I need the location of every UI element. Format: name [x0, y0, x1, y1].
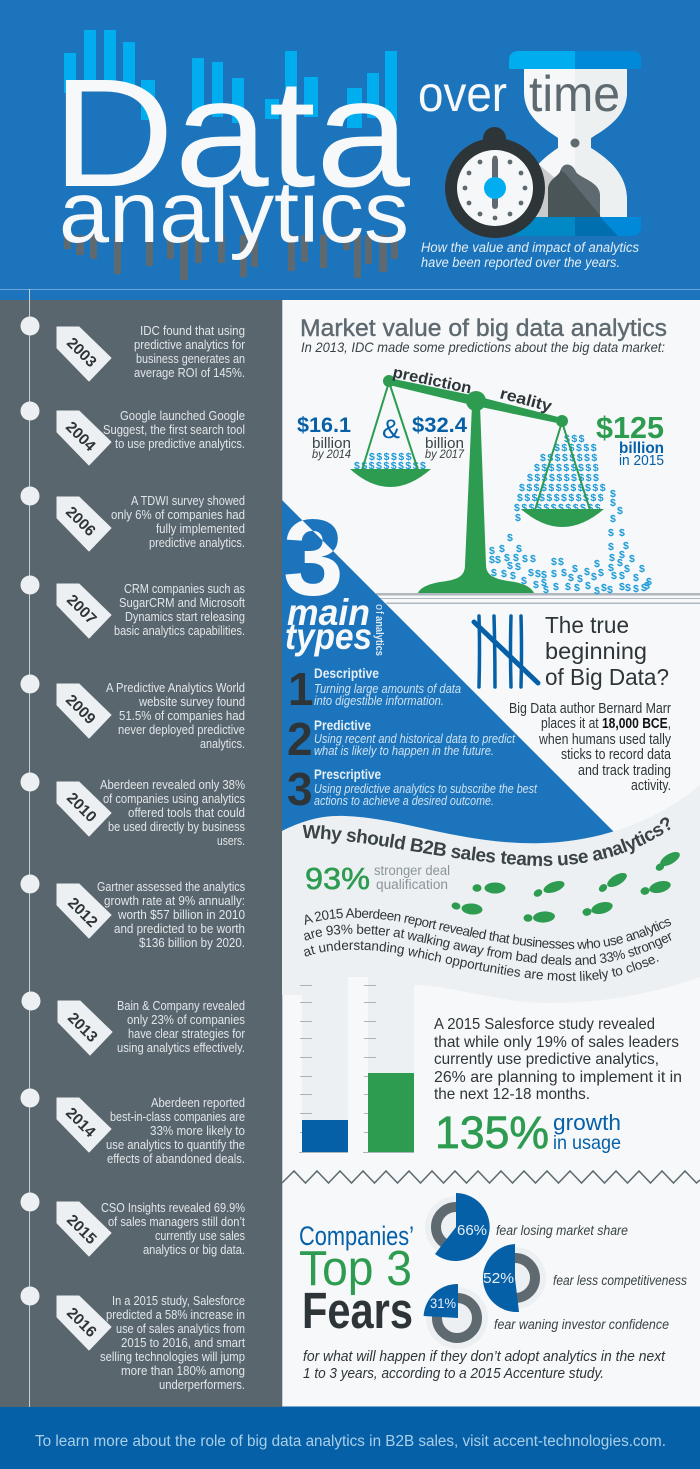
icon: hourglass — [509, 51, 641, 236]
dollar pile: floor: $$$$$$$$$$$$$$$$$$$$$$$$$$$$$$$$$$$$$$$$$$$$$$$$$$$$$$$$$$$$$$$$ — [489, 488, 652, 597]
timeline entry 2006: A TDWI survey showed — [131, 493, 245, 508]
timeline entry 2015: CSO Insights revealed 69.9% — [101, 1200, 245, 1215]
heading: time: time — [529, 66, 620, 122]
header banner — [0, 0, 700, 300]
heading: main types — [285, 592, 372, 657]
title: analytics: analytics — [59, 164, 409, 261]
scale illustration — [297, 364, 664, 597]
text: Salesforce study: currently use predictive analytics, — [434, 1051, 659, 1068]
heading: over: over — [418, 66, 507, 122]
timeline entry 2006: predictive analytics. — [149, 535, 245, 550]
timeline entry 2014 — [20, 1088, 245, 1166]
donut: 66% fear losing market share: 66% — [457, 1223, 487, 1239]
dollar pile: right pan: $$$$$$$$$$$$ — [519, 482, 607, 494]
dollar pile: right pan: $ — [515, 512, 522, 524]
timeline entry 2007: SugarCRM and Microsoft — [119, 595, 245, 610]
timeline entry 2006: fully implemented — [156, 521, 245, 536]
stat: $32.4 billion — [412, 414, 467, 461]
scale pans — [350, 469, 604, 527]
dollar pile: left pan: $$$$$$$$$$ — [354, 460, 427, 472]
timeline entry 2010: be used directly by business — [108, 819, 245, 834]
type 2: predictive: Using recent and historical data to predict — [314, 731, 516, 746]
gauge fill: 45% — [368, 1073, 414, 1152]
stat: $16.1 billion — [297, 414, 351, 461]
timeline entry 2012 — [20, 874, 245, 950]
rotated label: of analytics — [373, 604, 385, 656]
beam label: reality: reality — [498, 385, 554, 416]
stat: $125 billion — [596, 410, 664, 469]
dollar pile: left pan — [354, 451, 427, 472]
type 3: prescriptive: Prescriptive — [314, 766, 381, 782]
text: Bernard Marr — [509, 701, 672, 794]
scale post — [418, 405, 534, 593]
donut: 31% fear waning investor confidence: 31% — [430, 1295, 456, 1311]
timeline entry 2016: 2015 to 2016, and smart — [121, 1335, 245, 1350]
dollar pile: right pan: $$$ — [564, 433, 586, 445]
heading: main types: main — [287, 592, 370, 633]
donut: 52% fear less competitiveness — [483, 1244, 687, 1312]
dollar pile: right pan: $$$$$$$$ — [540, 452, 599, 464]
timeline entry 2013 — [22, 992, 246, 1055]
text: Bernard Marr: places it at 18,000 BCE, — [541, 716, 671, 732]
timeline entry 2013: only 23% of companies — [127, 1012, 245, 1027]
timeline entry 2010: 2010 — [63, 790, 99, 826]
text: Salesforce study: the next 12-18 months. — [434, 1086, 590, 1103]
timeline entry 2013: 2013 — [64, 1010, 101, 1046]
timeline entry 2003: average ROI of 145%. — [134, 365, 245, 380]
scale beam — [383, 375, 568, 427]
icon: tally marks — [474, 616, 538, 687]
timeline entry 2010: users. — [217, 833, 245, 848]
timeline entry 2012: $136 billion by 2020. — [139, 935, 245, 950]
rotated label: of analytics: analytics — [373, 616, 385, 656]
timeline entry 2014: effects of abandoned deals. — [107, 1151, 245, 1166]
timeline entry 2004: to use predictive analytics. — [115, 436, 245, 451]
timeline entry 2007: CRM companies such as — [124, 581, 245, 596]
timeline entry 2003: predictive analytics for — [134, 337, 246, 352]
footer banner — [0, 1406, 700, 1469]
text: Salesforce study: 26% are planning to implement it in — [434, 1069, 682, 1086]
timeline entry 2015: analytics or big data. — [143, 1242, 245, 1257]
heading: true beginning — [545, 612, 669, 690]
timeline entry 2012: 2012 — [64, 895, 100, 931]
timeline entry 2009: analytics. — [200, 736, 245, 751]
caption: fears — [303, 1348, 666, 1382]
stat: $16.1 billion: by 2014 — [312, 449, 351, 461]
big numeral 3: 3 — [283, 497, 344, 619]
timeline entry 2013: using analytics effectively. — [117, 1040, 245, 1055]
timeline entry 2009: A Predictive Analytics World — [106, 680, 245, 695]
dollar pile: right pan: $$$$$$$$$$$$ — [514, 502, 602, 514]
stat: 93%: 93% — [305, 861, 370, 896]
timeline entry 2015: of sales managers still don’t — [108, 1214, 245, 1229]
gap between gauges — [348, 977, 368, 1153]
title: Data: Data — [52, 47, 410, 219]
heading: Companies' Top 3 Fears: Top 3 — [299, 1242, 412, 1296]
caption: fears: 1 to 3 years, according to a 2015 Accenture study. — [303, 1365, 604, 1382]
text: Bernard Marr: Big Data author Bernard Marr — [509, 701, 671, 717]
heading: Companies' Top 3 Fears — [299, 1221, 414, 1339]
timeline entry 2010: Aberdeen revealed only 38% — [100, 777, 245, 792]
donut: 31% fear waning investor confidence: fear waning investor confidence — [494, 1317, 669, 1332]
timeline entry 2016: use of sales analytics from — [116, 1321, 245, 1336]
type 3: prescriptive — [287, 763, 538, 815]
gauge fill: 19% — [302, 1120, 348, 1152]
timeline entry 2014: best-in-class companies are — [110, 1109, 245, 1124]
timeline entry 2014: Aberdeen reported — [151, 1095, 245, 1110]
icon: stopwatch — [445, 127, 545, 238]
dollar pile: right pan: $$$$$$ — [554, 442, 598, 454]
type 1: descriptive: into digestible information. — [314, 693, 444, 708]
timeline entry 2007: Dynamics start releasing — [125, 609, 245, 624]
timeline entry 2006: only 6% of companies had — [111, 507, 245, 522]
text: Bernard Marr: activity. — [631, 778, 671, 794]
timeline entry 2016 — [20, 1286, 245, 1392]
panel: B2B wave band — [282, 785, 700, 1152]
timeline entry 2004: Google launched Google — [120, 408, 245, 423]
gauge ticks — [299, 986, 414, 1152]
timeline entry 2016: 2016 — [63, 1305, 100, 1341]
type 2: predictive: Predictive — [314, 717, 371, 733]
stat: $125 billion: billion — [619, 440, 664, 457]
rotated label: of analytics: of — [373, 604, 385, 615]
heading: main types: types — [285, 616, 372, 657]
text: Aberdeen report: A 2015 Aberdeen report revealed that businesses who use analytics — [304, 908, 672, 950]
timeline entry 2004: 2004 — [62, 419, 99, 455]
timeline entry 2015: currently use sales — [155, 1228, 245, 1243]
type 1: descriptive: Descriptive — [314, 665, 379, 681]
timeline entry 2004 — [20, 402, 245, 465]
timeline entry 2007 — [20, 576, 245, 638]
subtitle: How the value and impact of analytics — [421, 240, 639, 255]
timeline entry 2014: 2014 — [62, 1105, 99, 1141]
stat label: stronger deal qualification — [374, 863, 450, 892]
timeline entry 2015: 2015 — [63, 1212, 100, 1248]
scale strings — [362, 382, 590, 510]
timeline entry 2007: basic analytics capabilities. — [114, 623, 245, 638]
timeline entry 2006: 2006 — [62, 504, 99, 540]
heading: why should B2B: Why should B2B sales teams use analytics? — [302, 817, 670, 866]
timeline entry 2006 — [20, 486, 245, 551]
dollar pile: right pan: $$$$$$$$$$$$ — [517, 492, 605, 504]
stat label: stronger deal qualification: qualification — [376, 877, 448, 892]
timeline entry 2009: 51.5% of companies had — [119, 708, 245, 723]
stat: $32.4 billion: by 2017 — [425, 449, 465, 461]
heading: Companies' Top 3 Fears: Fears — [302, 1282, 413, 1339]
stat: 135% growth — [435, 1107, 621, 1158]
footer banner: To learn more about the role of big data analytics in B2B sales, visit accent-technologies.com. — [35, 1433, 666, 1450]
donut: 66% fear losing market share — [425, 1193, 628, 1261]
text: Salesforce study: that while only 19% of sales leaders — [434, 1034, 679, 1051]
timeline entry 2009: website survey found — [138, 694, 245, 709]
timeline entry 2016: more than 180% among — [121, 1363, 245, 1378]
timeline entry 2015 — [20, 1192, 245, 1257]
timeline entry 2007: 2007 — [63, 592, 99, 628]
timeline entry 2012: worth $57 billion in 2010 — [117, 907, 245, 922]
chart: usage gauges — [299, 986, 414, 1152]
subtitle: have been reported over the years. — [421, 255, 620, 270]
panel: timeline — [0, 289, 282, 1407]
panel: right column background — [282, 300, 700, 1407]
text: Bernard Marr: when humans used tally — [538, 732, 672, 748]
timeline entry 2010: of companies using analytics — [103, 791, 245, 806]
timeline entry 2013: Bain & Company revealed — [117, 998, 245, 1013]
type 3: prescriptive: actions to achieve a desired outcome. — [314, 793, 494, 808]
timeline entry 2010: offered tools that could — [128, 805, 245, 820]
donut: 31% fear waning investor confidence — [424, 1284, 669, 1349]
timeline entry 2009: never deployed predictive — [118, 722, 245, 737]
market value subtitle: In 2013, IDC made some predictions about the big data market: — [301, 339, 665, 355]
timeline entry 2012: and predicted to be worth — [114, 921, 245, 936]
chart bars above title — [64, 30, 397, 128]
timeline entry 2003: IDC found that using — [140, 323, 245, 338]
ampersand: & — [382, 414, 400, 444]
timeline entry 2014: 33% more likely to — [150, 1123, 245, 1138]
timeline entry 2012: growth rate at 9% annually: — [104, 893, 245, 908]
panel: 3 main types triangle — [282, 500, 640, 858]
donut: 52% fear less competitiveness: 52% — [483, 1271, 514, 1287]
big numeral 3: 3 — [283, 497, 344, 619]
heading: true beginning: The true — [545, 612, 629, 638]
timeline entry 2016: In a 2015 study, Salesforce — [112, 1293, 245, 1308]
text: Bernard Marr: sticks to record data — [561, 747, 672, 763]
type 2: predictive: 2 — [287, 713, 313, 765]
timeline entry 2014: use analytics to quantify the — [106, 1137, 245, 1152]
type 3: prescriptive: Using predictive analytics to subscribe the best — [314, 781, 538, 796]
caption: fears: for what will happen if they don’t adopt analytics in the next — [303, 1348, 666, 1365]
timeline entry 2003: 2003 — [63, 335, 100, 371]
timeline entry 2004: Suggest, the first search tool — [103, 422, 245, 437]
timeline entry 2012: Gartner assessed the analytics — [97, 879, 245, 894]
stat: 135% growth: growth — [553, 1110, 621, 1135]
subtitle — [421, 240, 639, 270]
stat: 135% growth: 135% — [435, 1107, 549, 1158]
stat: 135% growth: in usage — [553, 1132, 621, 1154]
stat: $125 billion: in 2015 — [619, 453, 664, 469]
timeline entry 2016: underperformers. — [159, 1377, 245, 1392]
stat: $125 billion: $125 — [596, 410, 664, 445]
chart bars below title — [64, 235, 398, 280]
icon: footsteps — [451, 849, 682, 923]
timeline entry 2010 — [20, 772, 245, 848]
text: Aberdeen report — [304, 908, 672, 982]
text: Salesforce study — [434, 1016, 682, 1103]
text: Aberdeen report: are 93% better at walking away from bad deals and 33% stronger — [304, 924, 672, 966]
dollar pile: right pan: $$$$$$$$$$ — [527, 472, 600, 484]
heading: Companies' Top 3 Fears: Companies’ — [299, 1221, 414, 1251]
type 1: descriptive: 1 — [288, 663, 314, 715]
big numeral 3 — [286, 519, 340, 596]
rule lines — [376, 593, 700, 604]
zigzag divider — [282, 1171, 700, 1183]
stat: $16.1 billion: billion — [312, 435, 351, 452]
timeline entry 2016: selling technologies will jump — [100, 1349, 245, 1364]
heading: true beginning: of Big Data? — [545, 664, 669, 690]
type 1: descriptive — [288, 663, 461, 715]
text: Aberdeen report: at understanding which opportunities are most likely to close. — [304, 940, 659, 982]
stat: $32.4 billion: billion — [425, 435, 464, 452]
stat: $32.4 billion: $32.4 — [412, 414, 467, 437]
timeline entry 2003: business generates an — [136, 351, 245, 366]
stat: $16.1 billion: $16.1 — [297, 414, 351, 437]
type 2: predictive — [287, 713, 516, 765]
heading: market value: Market value of big data analytics — [300, 315, 667, 342]
timeline entry 2003 — [20, 316, 246, 381]
type 3: prescriptive: 3 — [287, 763, 313, 815]
timeline entry 2009: 2009 — [62, 692, 99, 728]
stat label: stronger deal qualification: stronger deal — [374, 863, 450, 878]
type 1: descriptive: Turning large amounts of data — [314, 681, 461, 696]
dollar pile: right pan — [514, 433, 607, 524]
text: Bernard Marr: and track trading — [578, 763, 671, 779]
dollar pile: left pan: $$$$$$ — [369, 451, 413, 463]
text: Salesforce study: A 2015 Salesforce study revealed — [434, 1016, 655, 1033]
timeline entry 2016: predicted a 58% increase in — [106, 1307, 245, 1322]
timeline entry 2009 — [20, 674, 245, 751]
type 2: predictive: what is likely to happen in the future. — [314, 743, 494, 758]
dollar pile: right pan: $$$$$$$$$ — [534, 462, 600, 474]
donut: 66% fear losing market share: fear losing market share — [496, 1223, 628, 1238]
beam label: prediction: prediction — [391, 364, 473, 398]
timeline entry 2013: have clear strategies for — [128, 1026, 246, 1041]
heading: true beginning: beginning — [545, 638, 647, 664]
